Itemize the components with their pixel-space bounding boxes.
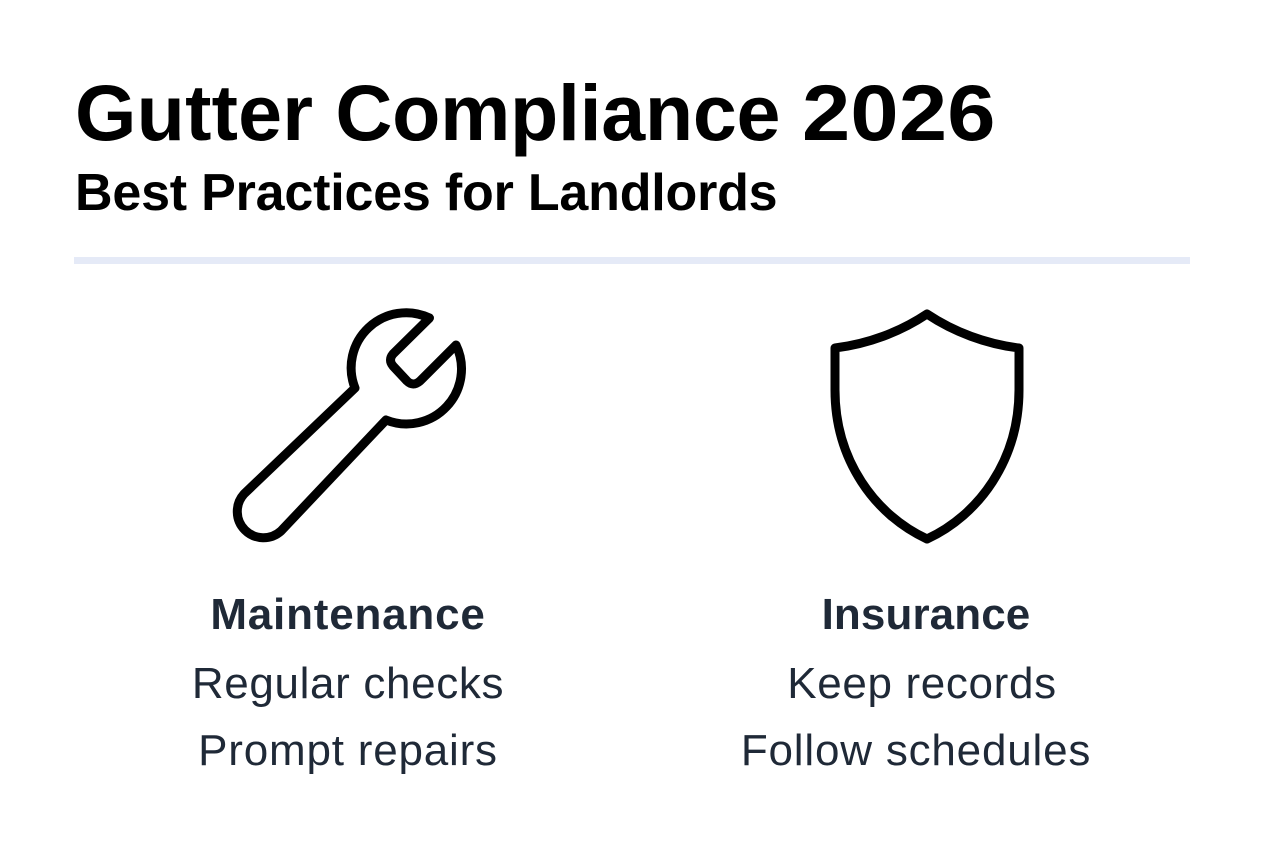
text: prompt repairs: Prompt repairs — [198, 726, 498, 775]
icon: shield — [830, 309, 1024, 544]
heading: maintenance: Maintenance — [210, 590, 486, 639]
column: insurance — [741, 590, 1091, 775]
subtitle: Best Practices for Landlords — [75, 164, 777, 222]
title: 2026 — [802, 68, 996, 157]
column: maintenance — [192, 590, 504, 775]
title: Gutter Compliance — [75, 68, 780, 157]
text: regular checks: Regular checks — [192, 659, 504, 708]
text: keep records: Keep records — [787, 659, 1057, 708]
text: follow schedules: Follow schedules — [741, 726, 1091, 775]
icon: wrench — [232, 308, 466, 542]
heading: insurance: Insurance — [822, 590, 1030, 639]
